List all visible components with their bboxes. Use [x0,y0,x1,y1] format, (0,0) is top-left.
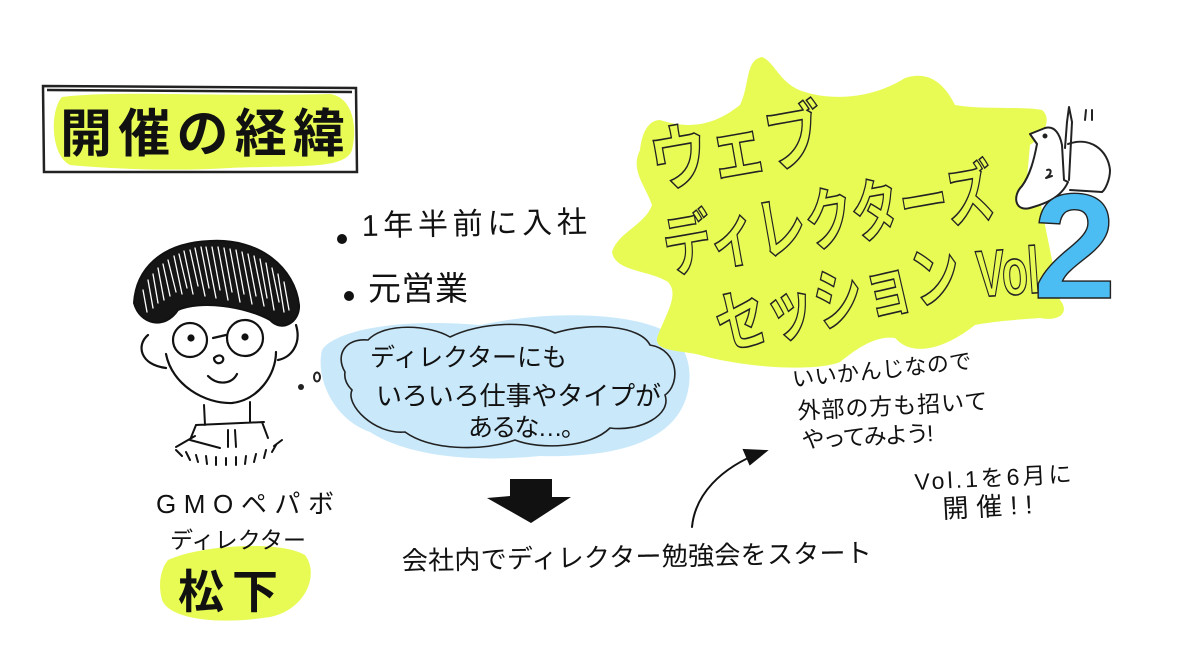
note: invite outsiders [791,348,988,453]
note: invite outsiders: やってみよう! [801,420,934,453]
arrow: down [487,479,571,523]
panel: heading [43,86,357,172]
title text: セッション [708,234,969,365]
heading text: 開催の経緯 [60,106,345,164]
panel: bullet list [337,206,587,307]
text: started study group: 会社内でディレクター勉強会をスタート [402,538,872,576]
note: vol.1 in June: 開催!! [942,489,1033,524]
title text [644,95,1054,365]
title text: ディレクターズ [657,154,1001,287]
note: invite outsiders: いいかんじなので [791,348,973,392]
glasses [173,320,263,357]
bullet: joined: 1年半前に入社 [362,206,587,243]
role: ディレクター [170,527,306,553]
bubble outline [341,324,675,448]
presenter caption [156,489,334,621]
title text: ウェブ [644,95,830,204]
face [166,352,276,403]
name highlight [160,546,311,621]
portrait [134,241,299,465]
affiliation: GMOペパボ [156,489,334,519]
heading frame [43,86,357,172]
heading highlight [54,94,354,170]
name: 松下 [178,566,278,618]
neck and sweater [176,402,282,465]
bubble text: あるな…。 [468,414,586,442]
hair [134,241,299,326]
thought dots [298,372,320,390]
bubble text [370,344,661,442]
bubble text: ディレクターにも [370,344,567,372]
arrow: curved [692,450,766,527]
ears [142,325,298,368]
Vol.: Vol. [974,232,1054,311]
panel: session title [612,57,1116,368]
bubble fill [321,315,690,458]
note: vol.1 in June [914,461,1072,524]
bird icon [1016,107,1110,209]
bubble text: いろいろ仕事やタイプが [376,381,661,411]
bullet: ex sales: 元営業 [368,270,468,307]
note: vol.1 in June: Vol.1を6月に [914,461,1072,495]
note: invite outsiders: 外部の方も招いて [797,388,988,424]
yellow blob [612,57,1064,368]
panel: thought bubble [298,315,690,458]
nose and mouth [208,355,237,383]
numeral 2: 2 [1033,162,1116,330]
